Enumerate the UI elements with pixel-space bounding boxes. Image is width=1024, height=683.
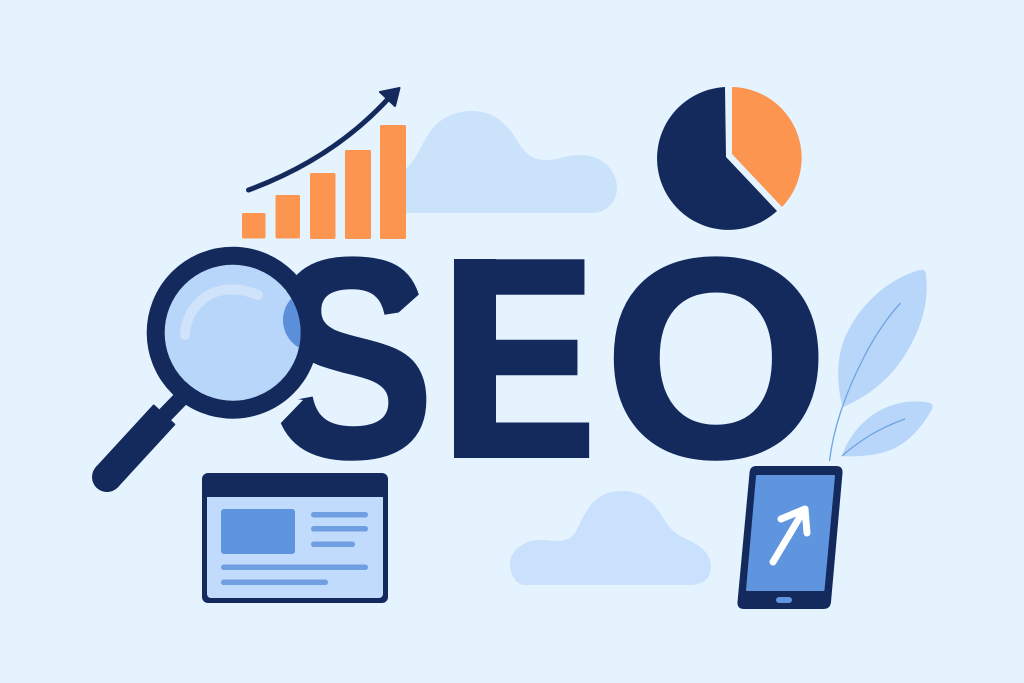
text lines [221, 512, 368, 585]
letter S: S [270, 201, 434, 517]
cloud: bottom [510, 491, 711, 585]
window frame [202, 473, 388, 603]
image placeholder [221, 509, 295, 554]
letter O: O [604, 200, 829, 516]
lens overlap tint [283, 298, 301, 348]
up arrow [773, 509, 807, 562]
phone body [737, 466, 843, 609]
large leaf [838, 270, 927, 407]
handle [92, 384, 195, 492]
web page window [202, 473, 388, 603]
smartphone [737, 466, 843, 609]
growth arrow [248, 88, 400, 190]
cloud: top [400, 111, 617, 213]
pie slice: orange [732, 87, 802, 207]
pie chart [657, 87, 802, 230]
letter E: E [440, 201, 597, 517]
veins [830, 303, 905, 461]
pie slice: navy [657, 87, 777, 230]
phone screen [746, 475, 835, 591]
lens highlight [185, 289, 258, 335]
lens [165, 265, 301, 401]
bars [242, 125, 406, 239]
bar chart with growth arrow [242, 88, 406, 239]
window content [207, 497, 383, 598]
small leaf [842, 401, 933, 456]
magnifying glass [92, 256, 347, 492]
SEO title [266, 200, 829, 517]
home button [776, 597, 792, 603]
lens rim [156, 256, 310, 410]
plant with leaves [830, 270, 933, 461]
